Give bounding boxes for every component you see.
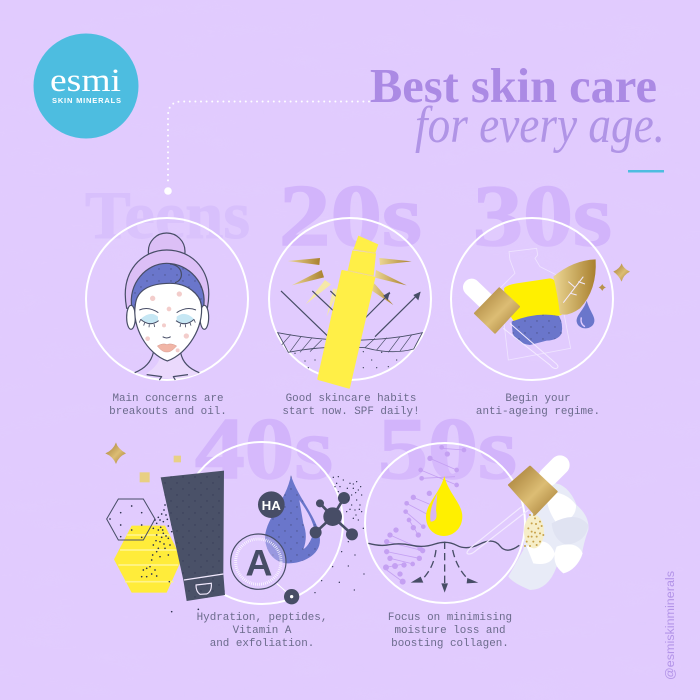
panel ring: 50s: [365, 443, 525, 603]
icon: cream tube, hexagons and molecule: HA: [262, 498, 281, 513]
caption: Teens: breakouts and oil.: [109, 406, 227, 418]
heading: 40s: 40s: [195, 401, 333, 498]
logo: esmi skin minerals: esmi: [50, 63, 121, 99]
panel ring: 30s: [451, 218, 613, 380]
caption: 40s: and exfoliation.: [210, 638, 314, 650]
title: Best skin care: [370, 58, 657, 113]
panel ring: Teens: [86, 218, 248, 380]
caption: 50s: moisture loss and: [394, 625, 506, 637]
dotted connector from title to Teens: [164, 102, 369, 195]
icon: SPF bottle with rays: [278, 236, 422, 388]
panel ring: 20s: [269, 218, 431, 380]
caption: 20s: Good skincare habits: [286, 393, 416, 405]
caption: 30s: anti-ageing regime.: [476, 406, 600, 418]
icon: cream tube, hexagons and molecule: A: [246, 541, 272, 583]
caption: 40s: Vitamin A: [233, 625, 292, 637]
icon: teen face: [125, 233, 209, 380]
icon: DNA, oil drop, skin layer, dropper and flower: [368, 445, 588, 593]
accent line: [628, 170, 664, 172]
icon: serum dropper, leaf and drop: [472, 248, 630, 369]
heading: 50s: 50s: [378, 401, 517, 498]
title: [370, 58, 665, 154]
caption: 50s: Focus on minimising: [388, 612, 512, 624]
caption: 40s: Hydration, peptides,: [197, 612, 327, 624]
caption: 50s: boosting collagen.: [391, 638, 509, 650]
caption: Teens: Main concerns are: [112, 393, 224, 405]
heading: 30s: 30s: [473, 168, 612, 265]
heading: Teens: Teens: [85, 177, 250, 253]
logo: esmi skin minerals: SKIN MINERALS: [52, 96, 121, 105]
caption: 20s: start now. SPF daily!: [282, 406, 420, 418]
social handle: @esmiskinminerals: [665, 571, 677, 680]
logo: esmi skin minerals: [34, 34, 138, 138]
heading: 20s: 20s: [279, 168, 422, 265]
panel ring: 40s: [181, 442, 343, 604]
icon: cream tube, hexagons and molecule: [105, 442, 364, 612]
title: for every age.: [415, 97, 665, 154]
caption: 30s: Begin your: [505, 393, 571, 405]
